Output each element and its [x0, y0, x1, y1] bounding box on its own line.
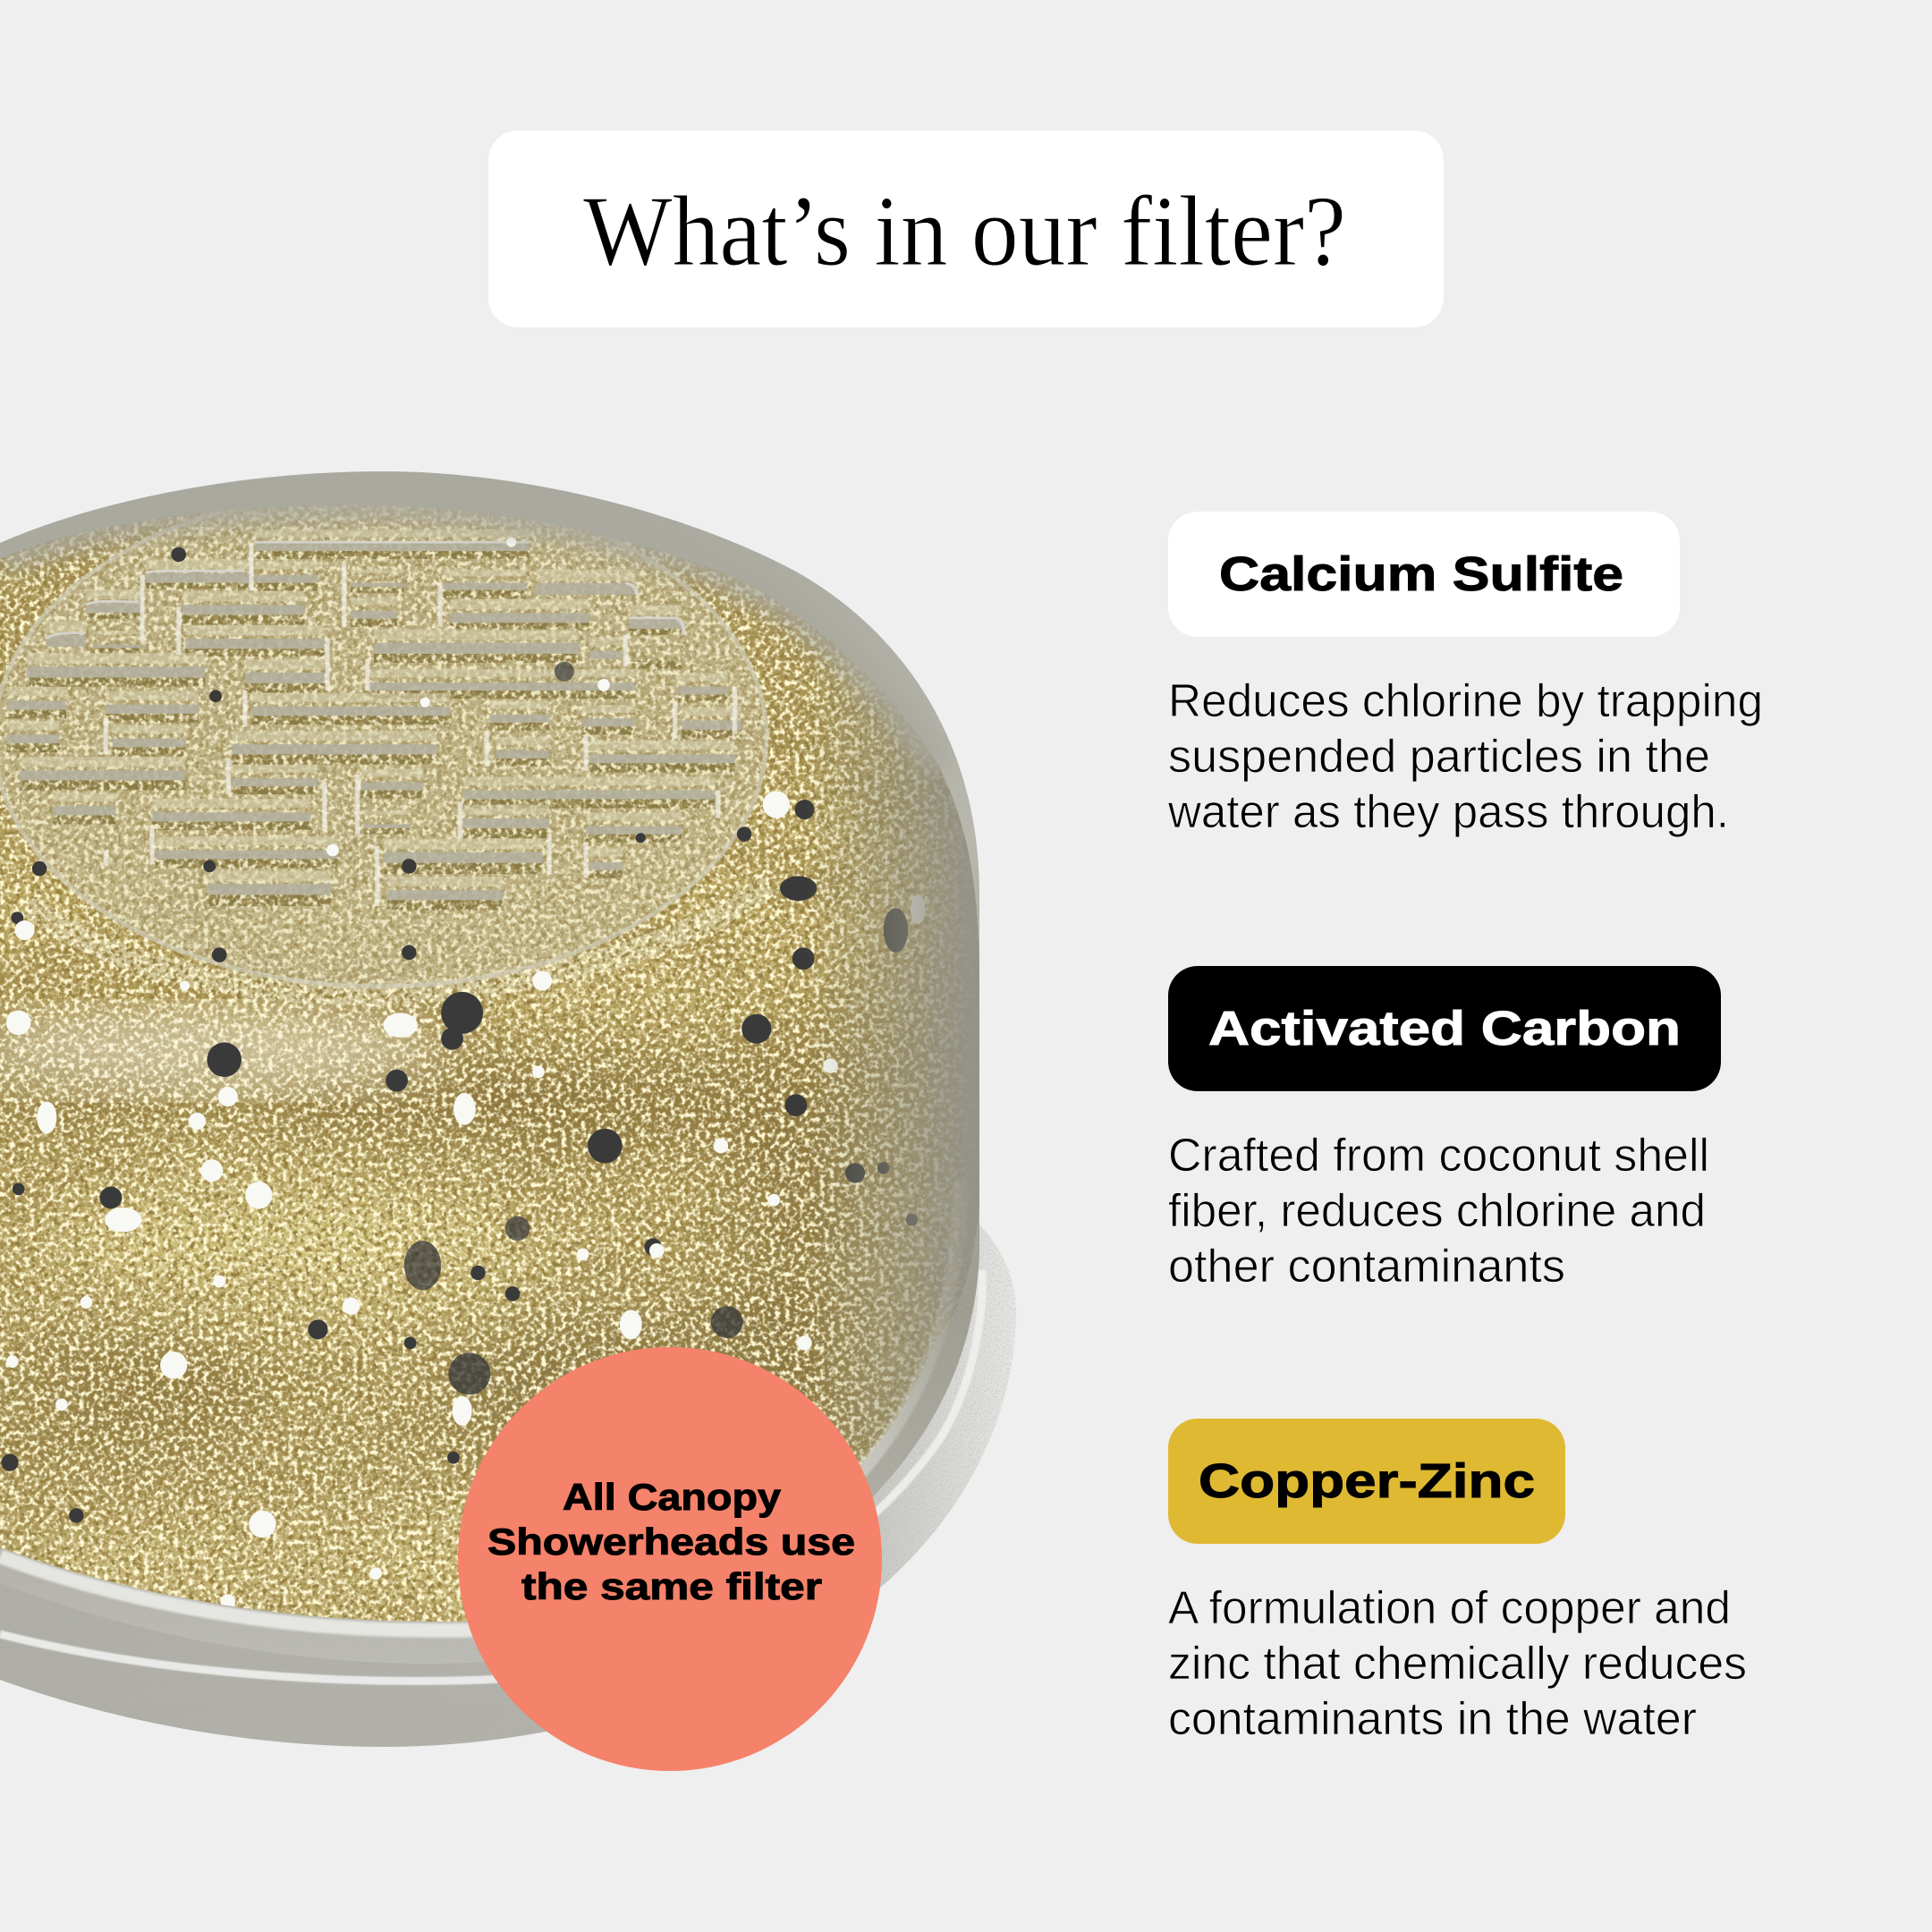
glass edge haze [0, 504, 939, 767]
tonal bands [0, 969, 911, 1605]
description: activated carbon: other contaminants [1168, 1241, 1565, 1292]
label pill: copper-zinc [1168, 1419, 1565, 1544]
label pill: copper-zinc: Copper-Zinc [1199, 1454, 1535, 1508]
inner white rim [0, 1181, 962, 1631]
panel: calcium sulfite [1167, 512, 1763, 838]
plate outline [0, 489, 767, 987]
description: calcium sulfite: water as they pass through. [1167, 786, 1729, 838]
panel: activated carbon [1168, 966, 1721, 1292]
sand media [0, 465, 1002, 1646]
label pill: calcium sulfite [1168, 512, 1680, 637]
plate haze [0, 489, 767, 987]
description: activated carbon: fiber, reduces chlorine and [1168, 1185, 1706, 1237]
description: copper-zinc: A formulation of copper and [1168, 1582, 1731, 1634]
description: activated carbon [1168, 1130, 1709, 1292]
glass dome [0, 465, 984, 1673]
description: calcium sulfite: Reduces chlorine by trapping [1168, 675, 1763, 727]
panel: copper-zinc [1168, 1419, 1747, 1745]
description: calcium sulfite: suspended particles in the [1168, 731, 1710, 783]
callout: same filter badge: All Canopy [563, 1476, 782, 1518]
speckles [1, 538, 926, 1609]
title: What’s in our filter? [583, 176, 1346, 287]
title [488, 131, 1444, 327]
callout: same filter badge: Showerheads use [487, 1521, 855, 1563]
description: copper-zinc [1168, 1582, 1747, 1745]
plate base [0, 489, 769, 994]
flange white ring [0, 1270, 982, 1681]
glare [0, 1008, 447, 1094]
grain [0, 465, 1002, 1646]
right side glass fade [817, 659, 979, 1465]
callout: same filter badge [458, 1347, 882, 1771]
description: calcium sulfite [1167, 675, 1763, 838]
filter product illustration [0, 465, 1020, 1753]
label pill: activated carbon [1168, 966, 1721, 1091]
base flange [0, 1216, 1020, 1753]
label pill: calcium sulfite: Calcium Sulfite [1219, 547, 1623, 601]
label pill: activated carbon: Activated Carbon [1208, 1002, 1681, 1055]
description: activated carbon: Crafted from coconut shell [1168, 1130, 1709, 1182]
callout: same filter badge: the same filter [521, 1565, 822, 1607]
maze slots [6, 530, 741, 906]
description: copper-zinc: contaminants in the water [1168, 1693, 1697, 1745]
description: copper-zinc: zinc that chemically reduces [1168, 1638, 1747, 1690]
